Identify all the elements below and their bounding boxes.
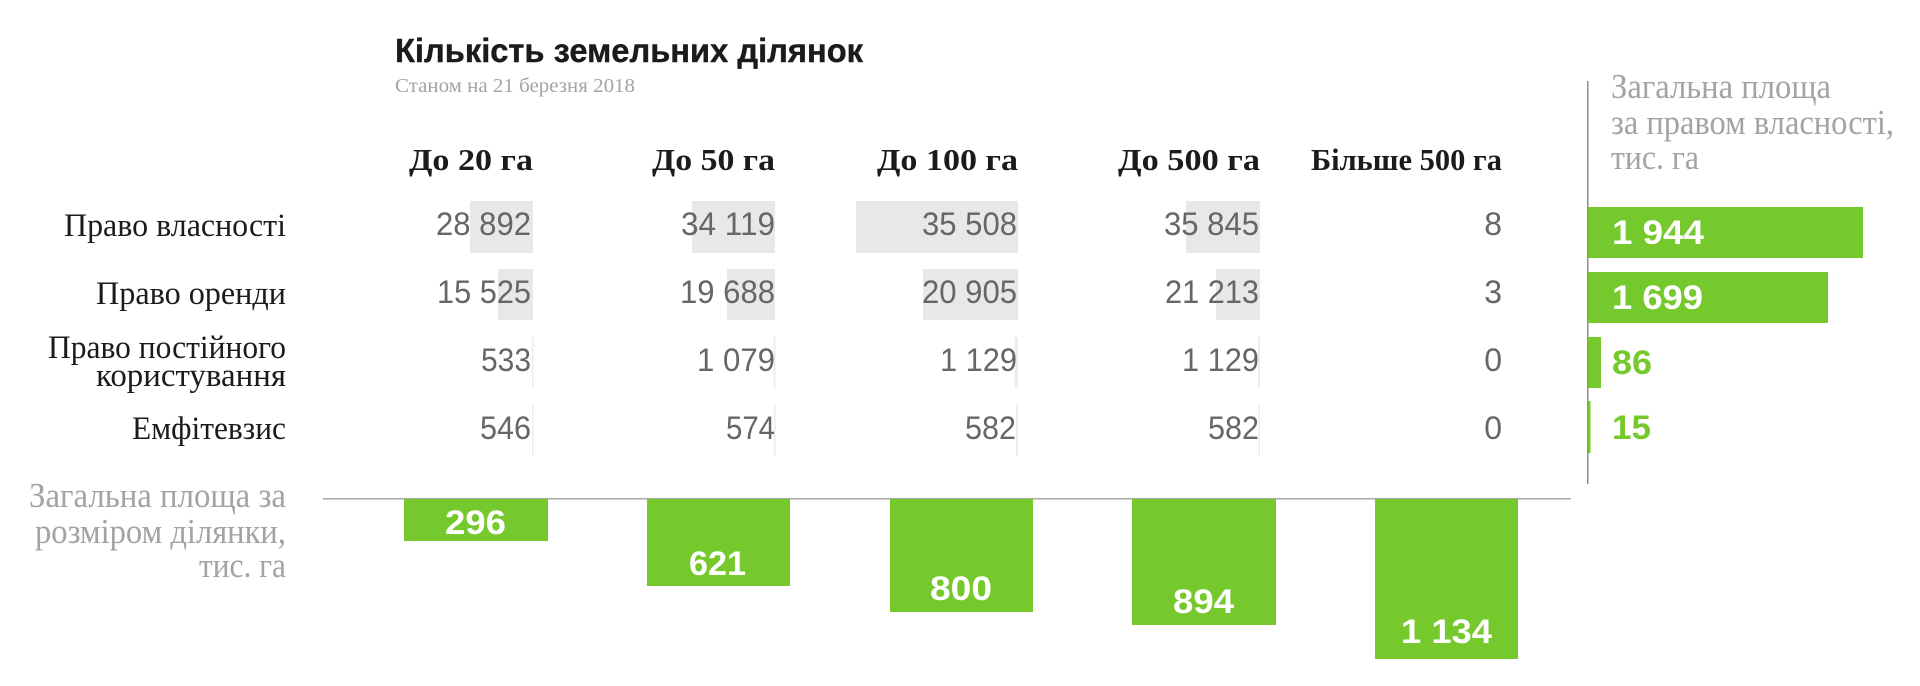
table row: право оренди: 19 688 bbox=[680, 274, 775, 310]
bar chart: area by plot size: 894 bbox=[1173, 583, 1234, 621]
bar chart: area by ownership right bbox=[1587, 81, 1863, 484]
table row: емфітевзис bbox=[480, 404, 1502, 456]
row labels: Право власності bbox=[64, 208, 286, 244]
table row: право постійного користування bbox=[481, 337, 1502, 388]
right label: total area by ownership right: тис. га bbox=[1611, 138, 1699, 177]
left label: total area by plot size: тис. га bbox=[199, 546, 286, 585]
bar chart: area by plot size: 1 134 bbox=[1401, 613, 1492, 651]
subtitle: Станом на 21 березня 2018 bbox=[395, 75, 635, 97]
table row: емфітевзис: 546 bbox=[480, 410, 531, 446]
table row: емфітевзис: 582 bbox=[1208, 410, 1259, 446]
table row: право власності: 35 508 bbox=[922, 206, 1017, 242]
table row: право оренди: 20 905 bbox=[922, 274, 1017, 310]
column headers: Більше 500 га bbox=[1311, 142, 1502, 177]
table row: емфітевзис: 0 bbox=[1484, 410, 1502, 446]
bar chart: area by ownership right: 86 bbox=[1612, 344, 1652, 382]
bar chart: area by plot size bbox=[323, 498, 1571, 659]
table row: право оренди bbox=[437, 269, 1502, 320]
table row: право оренди: 3 bbox=[1484, 274, 1502, 310]
row labels: Право оренди bbox=[96, 276, 286, 312]
table row: право оренди: 21 213 bbox=[1165, 274, 1259, 310]
table row: право власності: 8 bbox=[1484, 206, 1502, 242]
table row: емфітевзис: 574 bbox=[726, 410, 775, 446]
right label: total area by ownership right: за правом власності, bbox=[1611, 103, 1894, 142]
table row: право постійного користування: 533 bbox=[481, 342, 531, 378]
bar chart: area by plot size: 296 bbox=[445, 504, 506, 542]
left label: total area by plot size bbox=[29, 476, 286, 585]
bar chart: area by ownership right: 1 699 bbox=[1612, 279, 1703, 317]
column headers: До 20 га bbox=[409, 142, 534, 177]
table row: право власності: 34 119 bbox=[681, 206, 775, 242]
bar chart: area by plot size: 800 bbox=[930, 570, 992, 608]
row labels: користування bbox=[96, 358, 286, 394]
column headers: До 50 га bbox=[652, 142, 776, 177]
table row: право постійного користування: 1 129 bbox=[940, 342, 1017, 378]
column headers bbox=[409, 142, 1502, 177]
left label: total area by plot size: розміром ділянки, bbox=[35, 512, 286, 551]
table row: право оренди: 15 525 bbox=[437, 274, 531, 310]
table row: емфітевзис: 582 bbox=[965, 410, 1016, 446]
table row: право постійного користування: 1 129 bbox=[1182, 342, 1259, 378]
row labels: Право постійного bbox=[48, 330, 286, 366]
table row: право власності: 28 892 bbox=[436, 206, 531, 242]
left label: total area by plot size: Загальна площа за bbox=[29, 476, 286, 515]
bar chart: area by plot size: 621 bbox=[689, 545, 746, 583]
bar chart: area by ownership right: 1 944 bbox=[1612, 214, 1704, 252]
column headers: До 500 га bbox=[1118, 142, 1261, 177]
title: Кількість земельних ділянок bbox=[395, 32, 863, 69]
row labels: Емфітевзис bbox=[132, 411, 286, 447]
right label: total area by ownership right: Загальна площа bbox=[1611, 67, 1831, 106]
bar chart: area by ownership right: 15 bbox=[1612, 409, 1651, 447]
column headers: До 100 га bbox=[877, 142, 1019, 177]
table row: право постійного користування: 1 079 bbox=[697, 342, 775, 378]
right label: total area by ownership right bbox=[1611, 67, 1894, 177]
table row: право власності: 35 845 bbox=[1164, 206, 1259, 242]
row labels bbox=[48, 208, 286, 447]
table row: право постійного користування: 0 bbox=[1484, 342, 1502, 378]
table row: право власності bbox=[436, 201, 1502, 253]
